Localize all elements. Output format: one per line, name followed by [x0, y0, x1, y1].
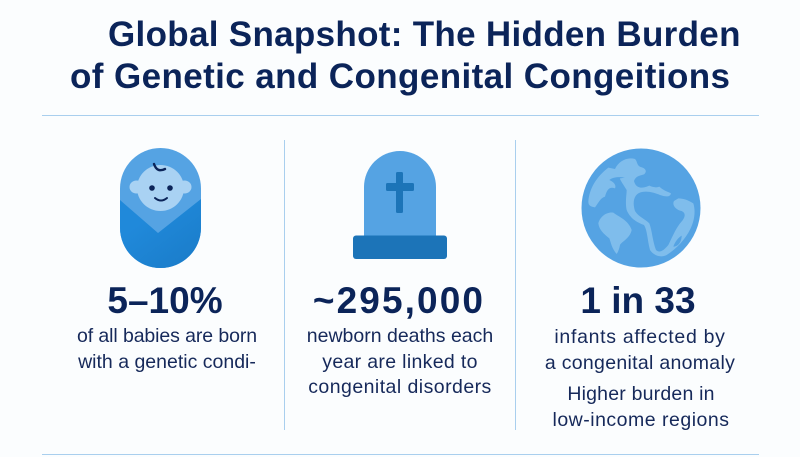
icon: swaddled baby — [120, 148, 201, 268]
text: deaths description: congenital disorders — [308, 376, 492, 398]
statistic: ~295,000: ~295,000 — [313, 280, 485, 321]
title: of Genetic and Congenital Congeitions — [70, 57, 730, 96]
statistic: 1 in 33: 1 in 33 — [580, 280, 696, 321]
text: anomaly description — [545, 326, 735, 374]
text: babies description: with a genetic condi- — [78, 350, 256, 372]
panel: babies statistic — [77, 148, 257, 372]
panel: newborn deaths statistic — [307, 151, 493, 398]
title — [70, 15, 741, 96]
text: anomaly description: a congenital anomaly — [545, 352, 735, 374]
icon: globe — [582, 148, 700, 268]
text: burden note: low-income regions — [552, 409, 730, 431]
icon: gravestone with cross — [353, 151, 447, 259]
text: deaths description — [307, 325, 493, 398]
title: Global Snapshot: The Hidden Burden — [108, 15, 741, 54]
text: babies description — [77, 325, 257, 372]
text: deaths description: newborn deaths each — [307, 325, 493, 347]
text: burden note — [552, 383, 730, 431]
text: burden note: Higher burden in — [567, 383, 715, 405]
panel: congenital anomaly statistic — [545, 148, 735, 431]
text: deaths description: year are linked to — [322, 350, 478, 372]
text: babies description: of all babies are born — [77, 325, 257, 347]
statistic: 5–10%: 5–10% — [107, 280, 223, 321]
text: anomaly description: infants affected by — [554, 326, 726, 348]
